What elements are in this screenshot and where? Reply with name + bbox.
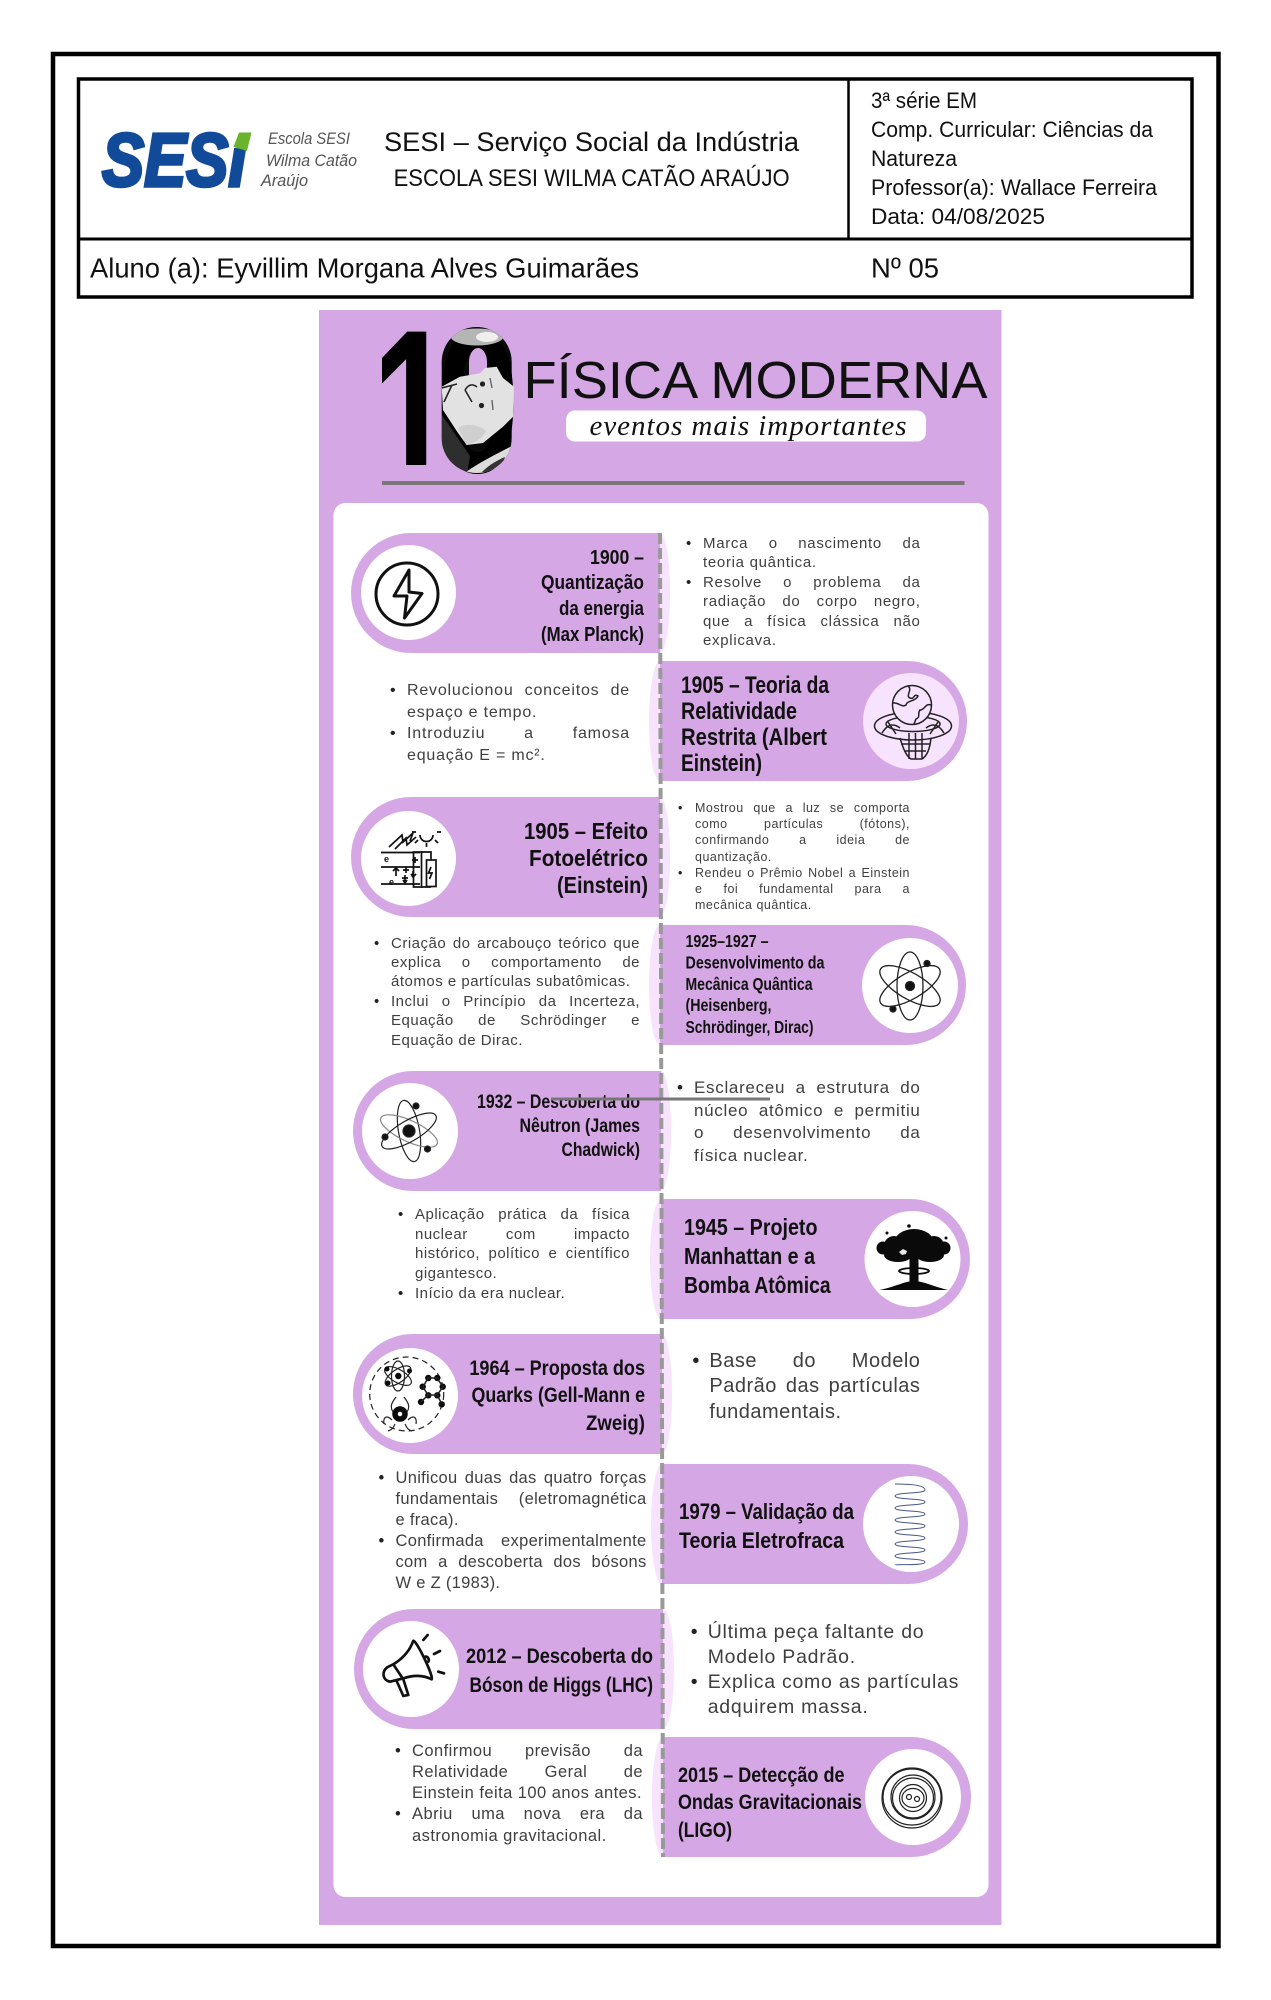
text block: 1905 relatividade details: Revolucionou conceitos de (407, 682, 630, 699)
class information (871, 88, 1157, 229)
event 1900: Quantização da energia: da energia (559, 597, 644, 620)
text: • (378, 1469, 385, 1487)
event 1905: Teoria da Relatividade Restrita: Relatividade (681, 698, 797, 725)
event 1932: Descoberta do Nêutron: Nêutron (James (520, 1116, 640, 1137)
event 1945: Projeto Manhattan: 1945 – Projeto (684, 1214, 818, 1240)
text block: 1945 details: nuclear com impacto (415, 1226, 630, 1243)
event 1905: Efeito Fotoelétrico: (Einstein) (557, 872, 648, 898)
icon: globe on funnel (874, 686, 952, 759)
title divider (382, 481, 964, 485)
text block: 1979 details: e fraca). (396, 1511, 459, 1529)
text block: 1900 details: Resolve o problema da (703, 574, 921, 591)
text block: 1905 fotoelétrico details: confirmando a ideia de (695, 833, 910, 847)
event 1905: Teoria da Relatividade Restrita: Restrita (Albert (681, 724, 827, 751)
text block: 2015 details: Confirmou previsão da (412, 1742, 643, 1760)
logo: SESI: Wilma Catão (266, 151, 357, 170)
event 1945: Projeto Manhattan: Bomba Atômica (684, 1272, 831, 1298)
stray gray line across 1932 title (551, 1098, 770, 1100)
panel: infographic background (319, 310, 1002, 1925)
text block: 1925-1927 details (374, 934, 640, 1049)
class information: 3ª série EM (871, 88, 977, 113)
text block: 1905 fotoelétrico details: e foi fundamental para a (695, 882, 910, 896)
panel: white timeline card (334, 503, 988, 1897)
text block: 1905 relatividade details (390, 682, 630, 764)
event 1905: Teoria da Relatividade Restrita: Einstein) (681, 750, 762, 777)
text block: 1979 details (378, 1469, 646, 1592)
text block: 1925-1927 details: Equação de Dirac. (391, 1032, 523, 1049)
logo: SESI: SESI (102, 118, 248, 202)
event 1945: Projeto Manhattan (650, 1199, 970, 1319)
text block: 1932 details: física nuclear. (694, 1146, 808, 1165)
class information: Data: 04/08/2025 (871, 204, 1045, 229)
event 1932: Descoberta do Nêutron: Chadwick) (562, 1140, 640, 1161)
event 1979: Teoria Eletrofraca: Teoria Eletrofraca (679, 1528, 845, 1553)
text block: 1900 details (686, 534, 921, 649)
text block: 1925-1927 details: Inclui o Princípio da Incerteza, (391, 993, 640, 1010)
event 1932: Descoberta do Nêutron (353, 1071, 671, 1191)
event 2015: Ondas Gravitacionais: Ondas Gravitacionais (678, 1790, 862, 1814)
text: • (686, 574, 692, 591)
text block: 1905 fotoelétrico details: quantização. (695, 850, 772, 864)
event 1964: Proposta dos Quarks: Zweig) (586, 1411, 645, 1435)
big number 10: 1 (372, 280, 453, 544)
event 1925–1927: Mecânica Quântica: (Heisenberg, (686, 995, 772, 1015)
text: • (692, 1350, 700, 1372)
logo: SESI: Araújo (260, 171, 308, 190)
text block: 2012 details: Última peça faltante do (708, 1620, 924, 1642)
event 1925–1927: Mecânica Quântica (649, 925, 966, 1045)
text block: 1925-1927 details: átomos e partículas subatômicas. (391, 973, 630, 990)
text block: 2012 details: adquirem massa. (708, 1696, 869, 1718)
text block: 1905 fotoelétrico details: Rendeu o Prêmio Nobel a Einstein (695, 866, 910, 880)
icon: spring wave (895, 1484, 925, 1565)
text block: 1905 fotoelétrico details: mecânica quântica. (695, 898, 812, 912)
text block: 1964 details (692, 1350, 920, 1423)
text block: 1925-1927 details: Equação de Schrödinger e (391, 1012, 640, 1029)
school name heading (384, 127, 800, 192)
text: • (390, 682, 396, 699)
big number 10: 0 (436, 288, 520, 515)
text block: 1905 fotoelétrico details: Mostrou que a luz se comporta (695, 801, 910, 815)
text: • (691, 1671, 698, 1693)
event 2012: Bóson de Higgs (354, 1609, 674, 1729)
text block: 1932 details: Esclareceu a estrutura do (694, 1078, 921, 1097)
text block: 1900 details: radiação do corpo negro, (703, 593, 921, 610)
text block: 1905 relatividade details: Introduziu a famosa (407, 725, 630, 742)
event 1905: Teoria da Relatividade Restrita: 1905 – Teoria da (681, 672, 830, 699)
text block: 2012 details: Explica como as partículas (708, 1671, 959, 1693)
text: • (390, 725, 396, 742)
text block: 2015 details: Abriu uma nova era da (412, 1805, 643, 1823)
event 1900: Quantização da energia: 1900 – (590, 546, 644, 569)
icon: particles in dashed circle (370, 1357, 446, 1431)
text block: 1964 details: Base do Modelo (709, 1350, 920, 1372)
timeline dashed axis (660, 533, 663, 1857)
text: • (677, 1078, 684, 1097)
text block: 2012 details (691, 1620, 959, 1718)
event 1945: Projeto Manhattan: Manhattan e a (684, 1243, 816, 1269)
event 1905: Efeito Fotoelétrico: e (384, 854, 389, 864)
icon: spiral (882, 1768, 942, 1828)
text block: 2015 details (395, 1742, 643, 1844)
text block: 1905 relatividade details: equação E = mc². (407, 747, 546, 764)
text block: 1979 details: fundamentais (eletromagnética (396, 1490, 646, 1508)
text: • (374, 993, 380, 1010)
event 1900: Quantização da energia: (Max Planck) (541, 623, 644, 646)
student name: Aluno (a): Eyvillim Morgana Alves Guimarães (90, 252, 639, 284)
event 1925–1927: Mecânica Quântica: Schrödinger, Dirac) (686, 1017, 814, 1037)
event 1964: Proposta dos Quarks: Quarks (Gell-Mann e (472, 1383, 645, 1407)
icon: atom (874, 952, 946, 1020)
subtitle pill: eventos mais importantes (590, 410, 906, 442)
event 1905: Efeito Fotoelétrico: 1905 – Efeito (524, 818, 648, 844)
school name heading: ESCOLA SESI WILMA CATÃO ARAÚJO (394, 165, 790, 192)
main title: FÍSICA MODERNA (524, 352, 988, 410)
text block: 1925-1927 details: Criação do arcabouço teórico que (391, 934, 640, 952)
text: • (678, 801, 683, 815)
text block: 2015 details: astronomia gravitacional. (412, 1826, 607, 1844)
text: • (691, 1620, 698, 1642)
text block: 1900 details: que a física clássica não (703, 613, 921, 630)
event 2015: Ondas Gravitacionais: (LIGO) (678, 1818, 732, 1842)
event 1900: Quantização da energia (351, 533, 670, 653)
text: • (398, 1285, 404, 1302)
event 1979: Teoria Eletrofraca: 1979 – Validação da (679, 1499, 855, 1524)
logo: SESI: Escola SESI (268, 129, 350, 148)
class information: Comp. Curricular: Ciências da (871, 117, 1153, 142)
text block: 1905 fotoelétrico details (678, 801, 910, 912)
text block: 1900 details: Marca o nascimento da (703, 534, 921, 552)
icon: photoelectric cell (381, 832, 441, 887)
icon: lightning bolt (376, 563, 438, 625)
text block: 1964 details: fundamentais. (709, 1401, 842, 1423)
text block: 1905 fotoelétrico details: como partículas (fótons), (695, 817, 910, 831)
text block: 1979 details: Confirmada experimentalmente (396, 1532, 646, 1550)
text block: 1932 details: o desenvolvimento da (694, 1123, 921, 1142)
event 1900: Quantização da energia: Quantização (541, 571, 644, 594)
text block: 1945 details: histórico, político e científico (415, 1245, 630, 1262)
icon: megaphone (384, 1635, 444, 1696)
text: • (686, 534, 692, 552)
event 1925–1927: Mecânica Quântica: Desenvolvimento da (686, 952, 825, 972)
text block: 1900 details: teoria quântica. (703, 554, 817, 571)
text block: 1900 details: explicava. (703, 632, 777, 649)
text block: 1932 details: núcleo atômico e permitiu (694, 1100, 921, 1120)
event 2015: Ondas Gravitacionais (652, 1737, 971, 1857)
text: • (374, 934, 380, 952)
event 1905: Efeito Fotoelétrico: Fotoelétrico (529, 845, 648, 871)
class information: Professor(a): Wallace Ferreira (871, 175, 1157, 200)
text block: 1945 details: Início da era nuclear. (415, 1285, 565, 1302)
text block: 1945 details: gigantesco. (415, 1265, 497, 1282)
student number: Nº 05 (871, 252, 939, 284)
text block: 1979 details: com a descoberta dos bósons (396, 1553, 646, 1571)
event 1905: Efeito Fotoelétrico: e (389, 877, 394, 887)
big number 10 (382, 327, 514, 474)
text: • (398, 1206, 404, 1223)
icon: atom with nucleus (376, 1099, 442, 1163)
text block: 1925-1927 details: explica o comportamento de (391, 954, 640, 971)
event 1905: Teoria da Relatividade Restrita (649, 661, 967, 781)
text block: 2015 details: Relatividade Geral de (412, 1763, 643, 1781)
event 2012: Bóson de Higgs: 2012 – Descoberta do (466, 1644, 653, 1668)
text: • (378, 1532, 385, 1550)
text block: 1964 details: Padrão das partículas (709, 1375, 920, 1397)
text block: 1945 details: Aplicação prática da física (415, 1206, 630, 1223)
event 1925–1927: Mecânica Quântica: 1925–1927 – (686, 931, 769, 951)
event 2012: Bóson de Higgs: Bóson de Higgs (LHC) (470, 1673, 653, 1697)
event 1964: Proposta dos Quarks: 1964 – Proposta dos (469, 1356, 645, 1380)
event 1905: Efeito Fotoelétrico (351, 797, 670, 917)
text block: 2012 details: Modelo Padrão. (708, 1646, 856, 1668)
event 1979: Teoria Eletrofraca (651, 1464, 968, 1584)
text: • (678, 866, 683, 880)
icon: mushroom cloud (876, 1224, 950, 1290)
event 1932: Descoberta do Nêutron: 1932 – Descoberta do (477, 1092, 640, 1113)
class information: Natureza (871, 146, 957, 171)
event 2015: Ondas Gravitacionais: 2015 – Detecção de (678, 1763, 845, 1787)
text block: 1905 relatividade details: espaço e tempo. (407, 704, 537, 721)
text: • (395, 1742, 401, 1760)
school name heading: SESI – Serviço Social da Indústria (384, 127, 800, 157)
text block: 2015 details: Einstein feita 100 anos antes. (412, 1784, 642, 1802)
event 1925–1927: Mecânica Quântica: Mecânica Quântica (686, 974, 813, 994)
text: • (395, 1805, 401, 1823)
text block: 1945 details (398, 1206, 630, 1302)
text block: 1979 details: Unificou duas das quatro forças (396, 1469, 646, 1487)
event 1964: Proposta dos Quarks (353, 1334, 672, 1454)
text block: 1979 details: W e Z (1983). (396, 1574, 500, 1592)
logo: SESI (101, 132, 356, 190)
header table (78, 79, 1192, 297)
text block: 1932 details (677, 1078, 921, 1165)
